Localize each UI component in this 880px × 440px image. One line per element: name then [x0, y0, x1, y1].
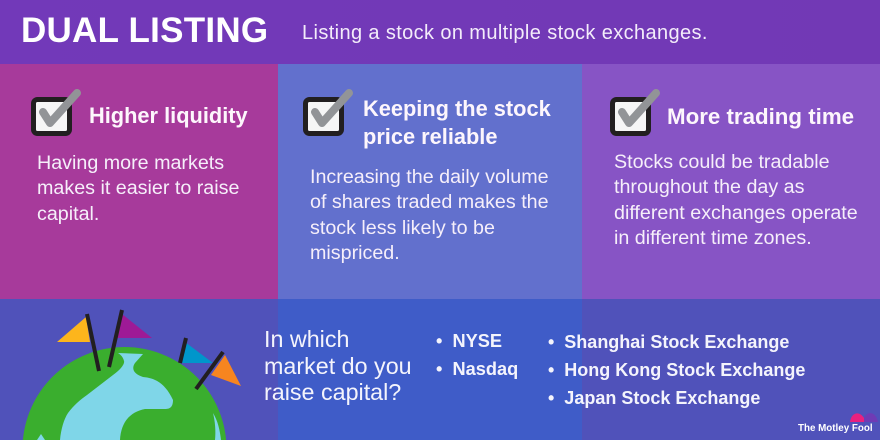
heading: Keeping the stock [363, 96, 551, 121]
header band [0, 0, 880, 64]
panel: reliable price [278, 64, 582, 299]
heading: price reliable [363, 124, 498, 148]
list: US exchanges [436, 331, 518, 379]
heading: More trading time [667, 104, 854, 129]
panel: more trading time [582, 64, 880, 299]
icon: checkbox [303, 89, 353, 136]
list: US exchanges: • NYSE [436, 331, 502, 351]
body text: in different time zones. [614, 227, 812, 249]
body text: throughout the day as [614, 176, 804, 198]
body text: mispriced. [310, 242, 400, 264]
flag: yellow [57, 314, 99, 371]
list: Asian exchanges: • Shanghai Stock Exchange [548, 332, 789, 352]
wordmark: The Motley Fool [798, 423, 873, 434]
body text: Increasing the daily volume [310, 166, 549, 188]
question text: raise capital? [264, 379, 401, 405]
subtitle: Listing a stock on multiple stock exchanges. [302, 22, 708, 44]
title: DUAL LISTING [21, 11, 268, 50]
body text: different exchanges operate [614, 202, 858, 224]
globe [23, 347, 226, 440]
question text [264, 326, 412, 405]
body text: makes it easier to raise [37, 177, 239, 199]
list: Asian exchanges [548, 332, 805, 408]
icon: jester hat [850, 413, 878, 422]
bottom band middle tint [278, 299, 582, 440]
body text: of shares traded makes the [310, 191, 549, 213]
body text [614, 151, 858, 249]
flag: orange [196, 352, 241, 389]
body text: capital. [37, 203, 99, 225]
logo: The Motley Fool [798, 413, 878, 434]
panel: higher liquidity [0, 64, 278, 299]
illustration: globe with flags [22, 310, 241, 440]
flag: purple [109, 310, 152, 367]
icon: checkbox [610, 89, 660, 136]
bottom band [0, 299, 880, 440]
body text: Stocks could be tradable [614, 151, 830, 173]
body text [310, 166, 549, 264]
list: Asian exchanges: • Japan Stock Exchange [548, 388, 760, 408]
body text: stock less likely to be [310, 217, 495, 239]
question text: market do you [264, 352, 412, 378]
icon: checkbox [31, 89, 81, 136]
flag: blue [180, 338, 213, 363]
list: Asian exchanges: • Hong Kong Stock Exchange [548, 360, 805, 380]
heading [363, 96, 551, 148]
body text [37, 152, 239, 225]
list: US exchanges: • Nasdaq [436, 359, 518, 379]
body text: Having more markets [37, 152, 224, 174]
heading: Higher liquidity [89, 103, 248, 128]
question text: In which [264, 326, 349, 352]
